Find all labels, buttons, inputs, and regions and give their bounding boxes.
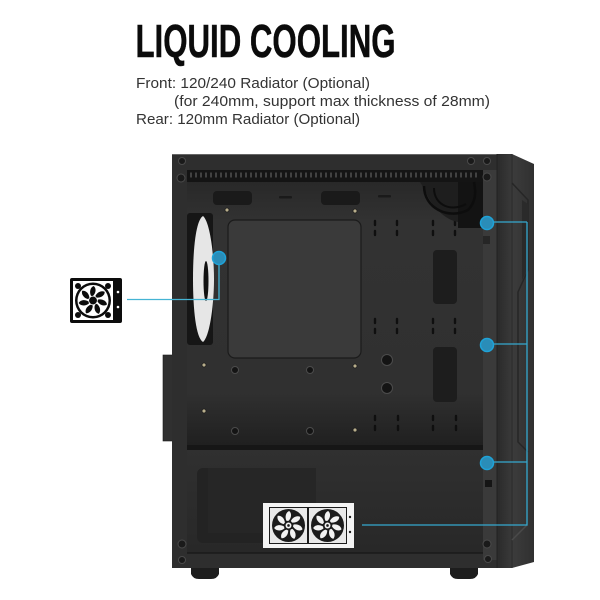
specification text — [136, 75, 490, 128]
tie slots — [375, 221, 456, 431]
case frame corner screws — [177, 158, 492, 564]
front marker dot bottom — [480, 456, 494, 470]
front marker dot middle — [480, 338, 494, 352]
pump and tubing — [420, 182, 483, 228]
front marker dot top — [480, 216, 494, 230]
rear fan — [187, 213, 214, 345]
interior back panel — [187, 172, 483, 448]
title: LIQUID COOLING — [136, 15, 396, 67]
rear expansion bracket — [163, 355, 175, 441]
front panel — [483, 154, 534, 568]
top vent strip — [187, 170, 483, 182]
case body — [172, 154, 497, 568]
top cable slots — [213, 191, 391, 205]
rear callout line — [127, 258, 219, 300]
specification text: (for 240mm, support max thickness of 28mm) — [174, 93, 490, 110]
large motherboard cutout — [228, 220, 361, 358]
icon: dual radiator — [263, 503, 354, 548]
specification text: Front: 120/240 Radiator (Optional) — [136, 75, 370, 92]
standoffs — [232, 354, 392, 434]
PC case — [163, 154, 534, 579]
feet — [191, 566, 478, 579]
PSU shroud — [187, 445, 483, 553]
specification text: Rear: 120mm Radiator (Optional) — [136, 111, 360, 128]
front callout lines — [362, 222, 527, 525]
gold screws — [202, 208, 357, 432]
right cable cutouts — [433, 250, 457, 402]
rear marker dot — [212, 252, 226, 264]
icon: single radiator — [70, 278, 122, 323]
